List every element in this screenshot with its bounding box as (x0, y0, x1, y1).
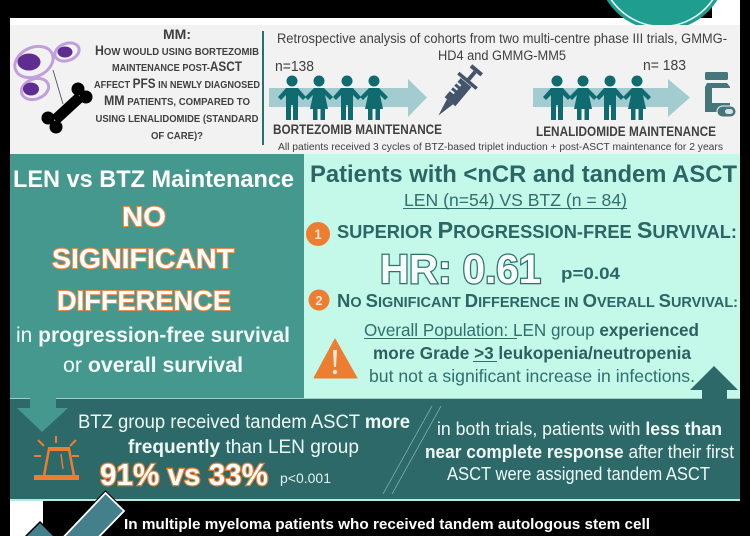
finding: PFS: SUPERIOR PROGRESSION-FREE SURVIVAL: (337, 217, 737, 243)
icon: check mark (14, 493, 124, 536)
badge 2 (308, 290, 330, 310)
panel: patients with <nCR and tandem ASCT (304, 154, 740, 399)
treatment note: All patients received 3 cycles of BTZ-based triplet induction + post-ASCT maintenance for 2 years (278, 141, 723, 153)
people (543, 76, 651, 120)
count: n=138: n=138 (275, 59, 314, 75)
logo circle (597, 0, 727, 30)
question heading (94, 27, 260, 142)
assignment text: near complete response after their first (425, 442, 734, 462)
badge 1 (306, 222, 330, 246)
panel: study design (10, 25, 740, 154)
lenalidomide arm (533, 58, 736, 139)
icon: siren (34, 436, 79, 480)
safety text: but not a significant increase in infections. (369, 366, 695, 386)
safety text (364, 320, 699, 386)
conclusion text: In multiple myeloma patients who received tandem autologous stem cell (124, 516, 650, 533)
question heading: USING LENALIDOMIDE (STANDARD (96, 113, 259, 125)
highlight: no significant difference: SIGNIFICANT (52, 243, 234, 274)
study description: HD4 and GMMG-MM5 (438, 48, 566, 63)
question heading: MM PATIENTS, COMPARED TO (104, 93, 250, 108)
bortezomib arm (269, 59, 487, 137)
statistic: 91% vs 33%: 91% vs 33% (100, 457, 268, 492)
highlight: no significant difference (52, 201, 234, 316)
highlight: no significant difference: DIFFERENCE (57, 285, 231, 316)
study description: Retrospective analysis of cohorts from two multi-centre phase III trials, GMMG- (277, 31, 727, 46)
badge 1: 1 (314, 227, 322, 242)
assignment text (425, 419, 734, 484)
icon: syringe (429, 61, 487, 123)
question heading: MM: (163, 27, 191, 42)
summary text: in progression-free survival (16, 324, 290, 347)
assignment text: in both trials, patients with less than (437, 419, 722, 439)
comparison text: frequently than LEN group (128, 437, 359, 458)
heading: Patients with <nCR and tandem ASCT (310, 161, 737, 188)
icon: bone (42, 82, 92, 134)
summary text (16, 324, 290, 377)
top white strip (10, 18, 740, 26)
people (278, 76, 388, 120)
icon: myeloma cells (10, 40, 82, 104)
label: BORTEZOMIB MAINTENANCE (273, 122, 442, 137)
arrow: up (690, 366, 738, 399)
divider slashes (383, 406, 441, 494)
p value: p<0.001 (280, 471, 331, 486)
question heading: OF CARE)? (151, 130, 203, 142)
heading: LEN vs BTZ Maintenance (13, 166, 294, 193)
icon: pill bottle (705, 72, 736, 117)
highlight: no significant difference: NO (122, 201, 166, 232)
finding: OS: NO SIGNIFICANT DIFFERENCE IN OVERALL SURVIVAL: (337, 290, 738, 311)
subheading: LEN (n=54) VS BTZ (n = 84) (404, 190, 627, 210)
summary text: or overall survival (63, 354, 243, 377)
panel: LEN vs BTZ maintenance (10, 154, 304, 399)
badge 2: 2 (316, 294, 323, 308)
safety text: more Grade >3 leukopenia/neutropenia (373, 343, 691, 363)
assignment text: ASCT were assigned tandem ASCT (447, 464, 710, 484)
arrow: down (17, 398, 68, 432)
arrow: lenalidomide (533, 79, 690, 117)
label: LENALIDOMIDE MAINTENANCE (536, 124, 716, 139)
icon: warning (314, 339, 357, 378)
right margin (740, 0, 750, 536)
panel: tandem ASCT (10, 366, 740, 501)
divider (262, 31, 264, 145)
count: n=183: n= 183 (643, 58, 686, 74)
safety text: Overall Population: LEN group experienced (364, 320, 699, 340)
arrow: bortezomib (269, 79, 427, 117)
comparison text (78, 412, 410, 458)
p value: p=0.04 (561, 265, 621, 283)
panel: conclusion (10, 493, 740, 536)
question heading: HOW WOULD USING BORTEZOMIB (95, 43, 259, 58)
comparison text: BTZ group received tandem ASCT more (78, 412, 410, 433)
hazard ratio: HR: 0.61 (380, 246, 541, 292)
question heading: MAINTENANCE POST-ASCT (112, 59, 243, 74)
study description (277, 31, 727, 63)
question heading: AFFECT PFS IN NEWLY DIAGNOSED (94, 76, 260, 91)
